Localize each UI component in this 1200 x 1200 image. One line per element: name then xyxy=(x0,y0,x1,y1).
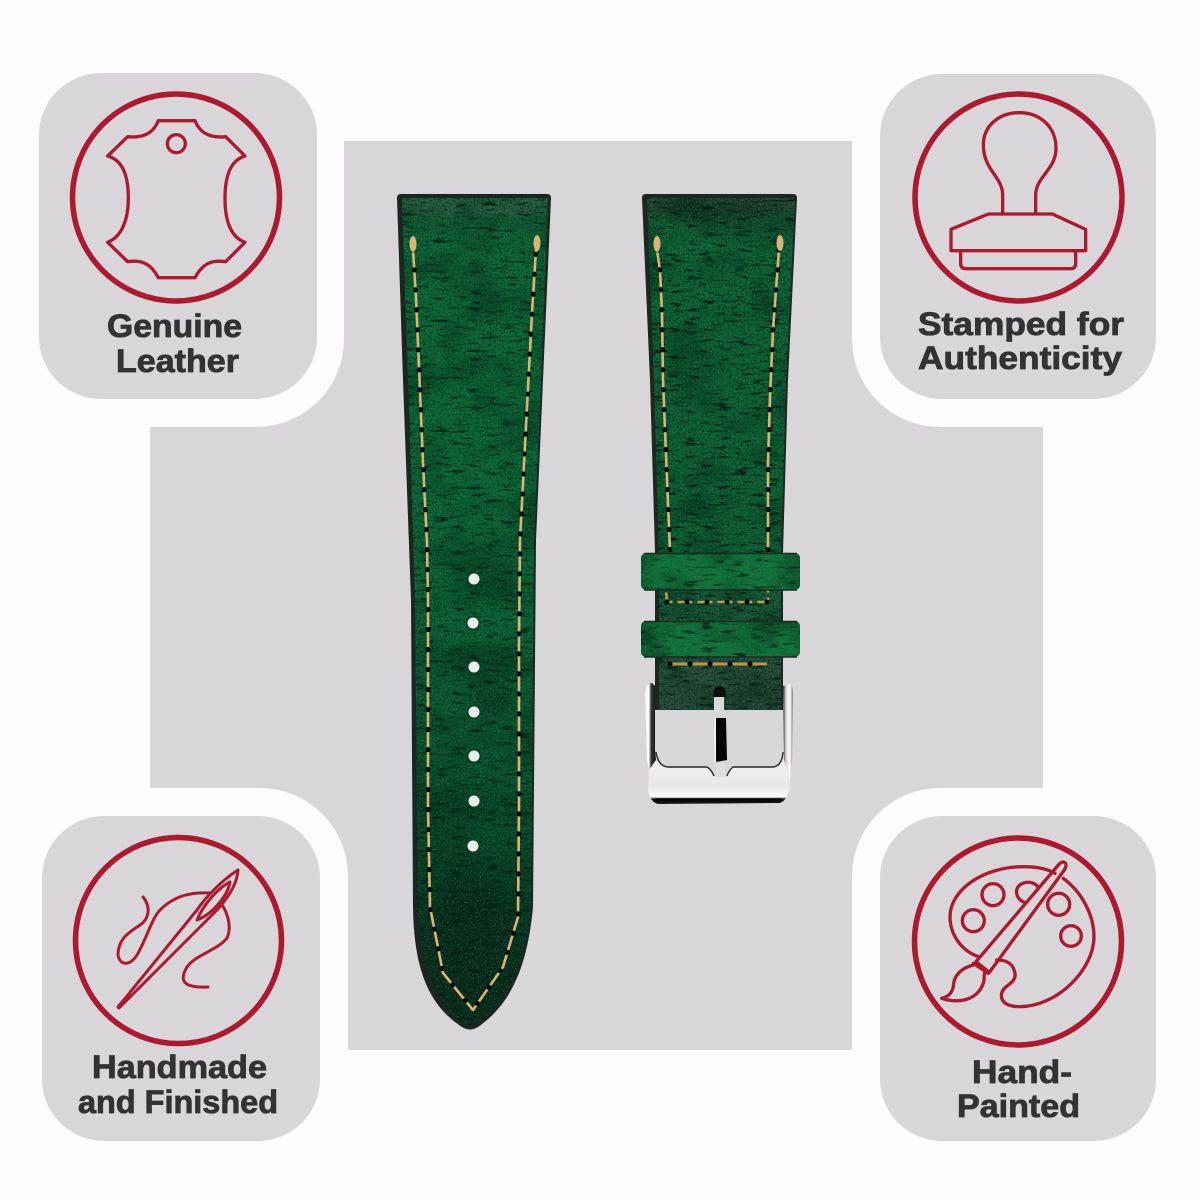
buckle plate bottom edge xyxy=(655,798,782,802)
buckle inner shadow line xyxy=(656,752,783,776)
label: Hand-Painted: Hand- xyxy=(972,1054,1072,1090)
buckle strap with keepers and buckle xyxy=(640,194,800,804)
buckle right bar xyxy=(783,684,793,780)
long watch strap xyxy=(395,194,555,1034)
label: Hand-Painted: Painted xyxy=(957,1088,1080,1124)
central grey panel xyxy=(150,141,1043,1050)
label: Genuine Leather: Genuine xyxy=(107,308,242,344)
short strap stitching xyxy=(654,235,784,664)
icon: palette and brush in circle xyxy=(914,838,1122,1045)
lower keeper xyxy=(641,621,800,657)
label: Stamped for Authenticity xyxy=(918,306,1124,376)
label: Handmade and Finished xyxy=(78,1049,278,1120)
buckle xyxy=(645,683,793,804)
buckle bottom plate xyxy=(648,745,792,804)
label: Handmade and Finished: Handmade xyxy=(92,1049,267,1085)
icon: needle and thread in circle xyxy=(76,838,282,1044)
long strap leather xyxy=(402,198,548,1026)
label: Hand-Painted xyxy=(957,1054,1080,1124)
label: Genuine Leather xyxy=(107,308,242,379)
upper keeper xyxy=(641,553,800,590)
card: stamped for authenticity xyxy=(880,74,1156,399)
card background xyxy=(39,73,317,399)
card background xyxy=(880,74,1156,399)
buckle left bar xyxy=(645,683,656,770)
label: Stamped for Authenticity: Authenticity xyxy=(918,340,1122,376)
card: hand-painted xyxy=(880,816,1156,1141)
label: Genuine Leather: Leather xyxy=(116,343,239,379)
label: Handmade and Finished: and Finished xyxy=(78,1084,278,1120)
short strap edge xyxy=(642,194,797,710)
icon: stamp in circle xyxy=(915,94,1122,301)
card: handmade and finished xyxy=(42,816,320,1141)
strap holes xyxy=(466,572,480,852)
card background xyxy=(880,816,1156,1141)
card background xyxy=(42,816,320,1141)
label: Stamped for Authenticity: Stamped for xyxy=(918,306,1124,342)
short strap leather xyxy=(640,194,800,714)
long strap stitching xyxy=(410,235,540,1010)
icon: leather hide in circle xyxy=(72,94,280,301)
long strap edge xyxy=(397,194,551,1030)
buckle tongue xyxy=(713,686,727,778)
card: genuine leather xyxy=(39,73,317,399)
